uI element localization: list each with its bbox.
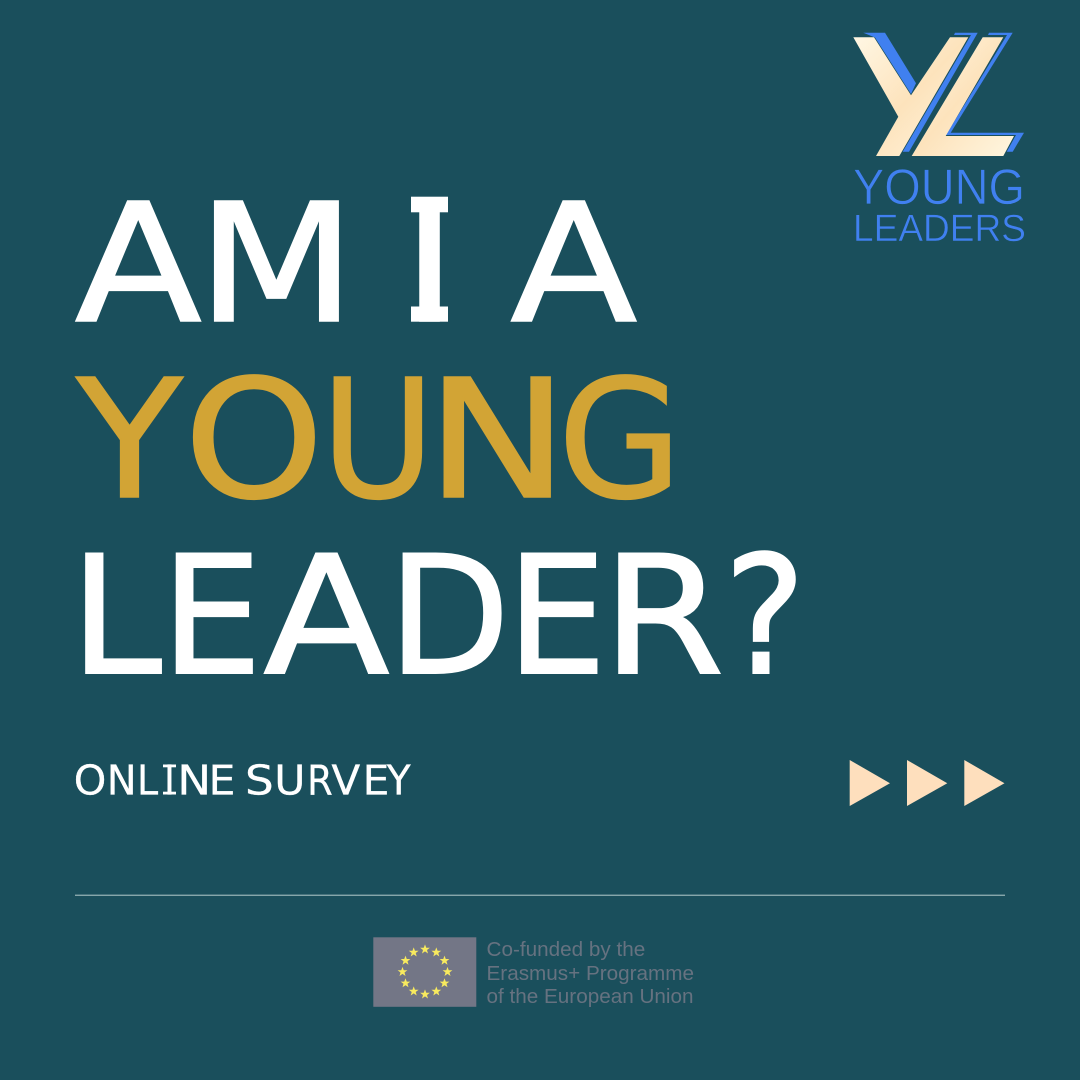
subtitle: online survey: N bbox=[107, 756, 137, 804]
subtitle: online survey: N bbox=[177, 757, 211, 805]
title line: LEADER?: E bbox=[506, 521, 607, 713]
subtitle: online survey: R bbox=[307, 758, 333, 805]
subtitle: online survey: O bbox=[74, 756, 106, 804]
EU flag bbox=[373, 937, 476, 1007]
title line: LEADER?: L bbox=[70, 520, 162, 712]
title line: LEADER?: D bbox=[388, 521, 510, 713]
funding statement: Erasmus+ Programme bbox=[486, 962, 694, 985]
subtitle: online survey: L bbox=[137, 757, 158, 805]
title line: AM I A: A bbox=[510, 170, 637, 360]
title line: LEADER?: ? bbox=[724, 521, 806, 712]
title line: AM I A: I bbox=[402, 170, 457, 360]
title line: YOUNG: U bbox=[321, 345, 435, 536]
funding statement: of the European Union bbox=[486, 985, 694, 1008]
title line: YOUNG bbox=[76, 345, 682, 536]
subtitle: online survey: U bbox=[274, 756, 305, 804]
logo: Young Leaders bbox=[853, 33, 1026, 250]
funding statement: Co-funded by the bbox=[486, 938, 645, 961]
title line: LEADER?: E bbox=[161, 522, 262, 712]
funding statement bbox=[486, 938, 694, 1008]
title line: LEADER? bbox=[70, 520, 806, 713]
title line: AM I A: M bbox=[197, 169, 356, 360]
title line: LEADER?: A bbox=[264, 522, 389, 713]
title line: YOUNG: G bbox=[558, 346, 682, 536]
logo wordmark: YOUNG: YOUNG bbox=[853, 159, 1025, 215]
subtitle: online survey: V bbox=[331, 756, 361, 804]
arrows: three next triangles bbox=[850, 760, 1004, 806]
subtitle: online survey: I bbox=[164, 757, 175, 805]
title line: YOUNG: O bbox=[184, 345, 324, 536]
subtitle: online survey: S bbox=[245, 757, 274, 805]
logo mark: YL monogram bbox=[853, 33, 1024, 156]
subtitle: online survey bbox=[74, 756, 411, 805]
title line: AM I A: A bbox=[75, 170, 202, 360]
subtitle: online survey: Y bbox=[386, 757, 411, 805]
subtitle: online survey: E bbox=[208, 756, 235, 804]
title line: LEADER?: R bbox=[602, 522, 724, 713]
logo wordmark: LEADERS: LEADERS bbox=[853, 208, 1026, 250]
subtitle: online survey: E bbox=[362, 756, 389, 804]
title line: YOUNG: Y bbox=[76, 345, 183, 536]
title line: YOUNG: N bbox=[426, 345, 568, 536]
title line: AM I A bbox=[75, 169, 637, 360]
